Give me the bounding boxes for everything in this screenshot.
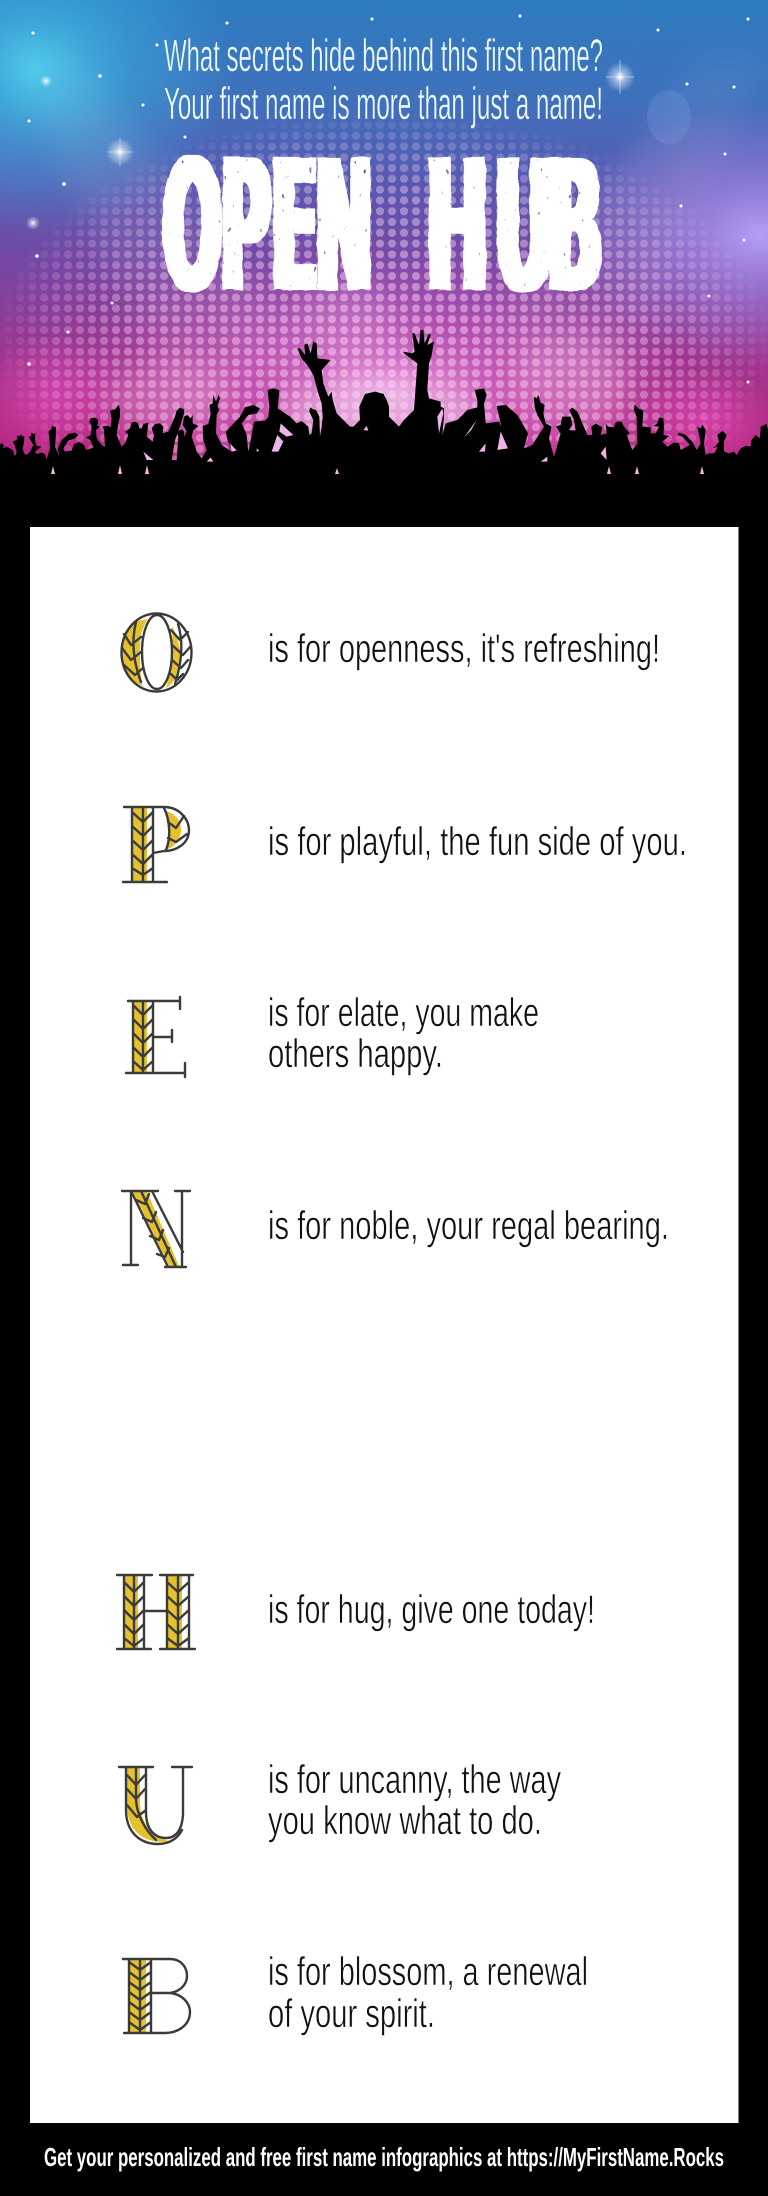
text: B: of your spirit. xyxy=(268,1992,435,2036)
icon: wheat letter N xyxy=(122,1191,190,1267)
icon: wheat letter E xyxy=(126,997,185,1077)
white content panel xyxy=(30,527,738,2123)
title: OPEN HUB: OPEN xyxy=(163,122,373,334)
icon: wheat letter P xyxy=(123,807,189,882)
text: H: is for hug, give one today! xyxy=(268,1588,595,1632)
crowd silhouette xyxy=(0,330,768,530)
row: letter E xyxy=(126,991,539,1077)
subtitle text xyxy=(164,30,603,129)
icon: wheat letter H xyxy=(117,1575,195,1649)
text: U: is for uncanny, the way xyxy=(268,1758,561,1802)
title: OPEN HUB xyxy=(163,121,603,334)
row: letter B xyxy=(123,1950,588,2036)
text: E: others happy. xyxy=(268,1032,443,1076)
header stage background xyxy=(0,0,768,460)
text: B xyxy=(268,1950,588,2036)
text: U: you know what to do. xyxy=(268,1799,542,1843)
row: letter O xyxy=(122,614,660,692)
row: letter U xyxy=(119,1758,561,1844)
row: letter N xyxy=(122,1191,669,1267)
icon: wheat letter B xyxy=(123,1959,190,2033)
title: OPEN HUB: HUB xyxy=(426,121,603,333)
row: letter P xyxy=(123,807,687,882)
sparkles xyxy=(26,14,750,384)
icon: wheat letter U xyxy=(119,1767,192,1844)
text: U xyxy=(268,1758,561,1843)
text: E: is for elate, you make xyxy=(268,991,539,1035)
icon: wheat letter O xyxy=(122,614,192,692)
text: B: is for blossom, a renewal xyxy=(268,1950,588,1994)
text: E xyxy=(268,991,539,1076)
row: letter H xyxy=(117,1575,595,1649)
